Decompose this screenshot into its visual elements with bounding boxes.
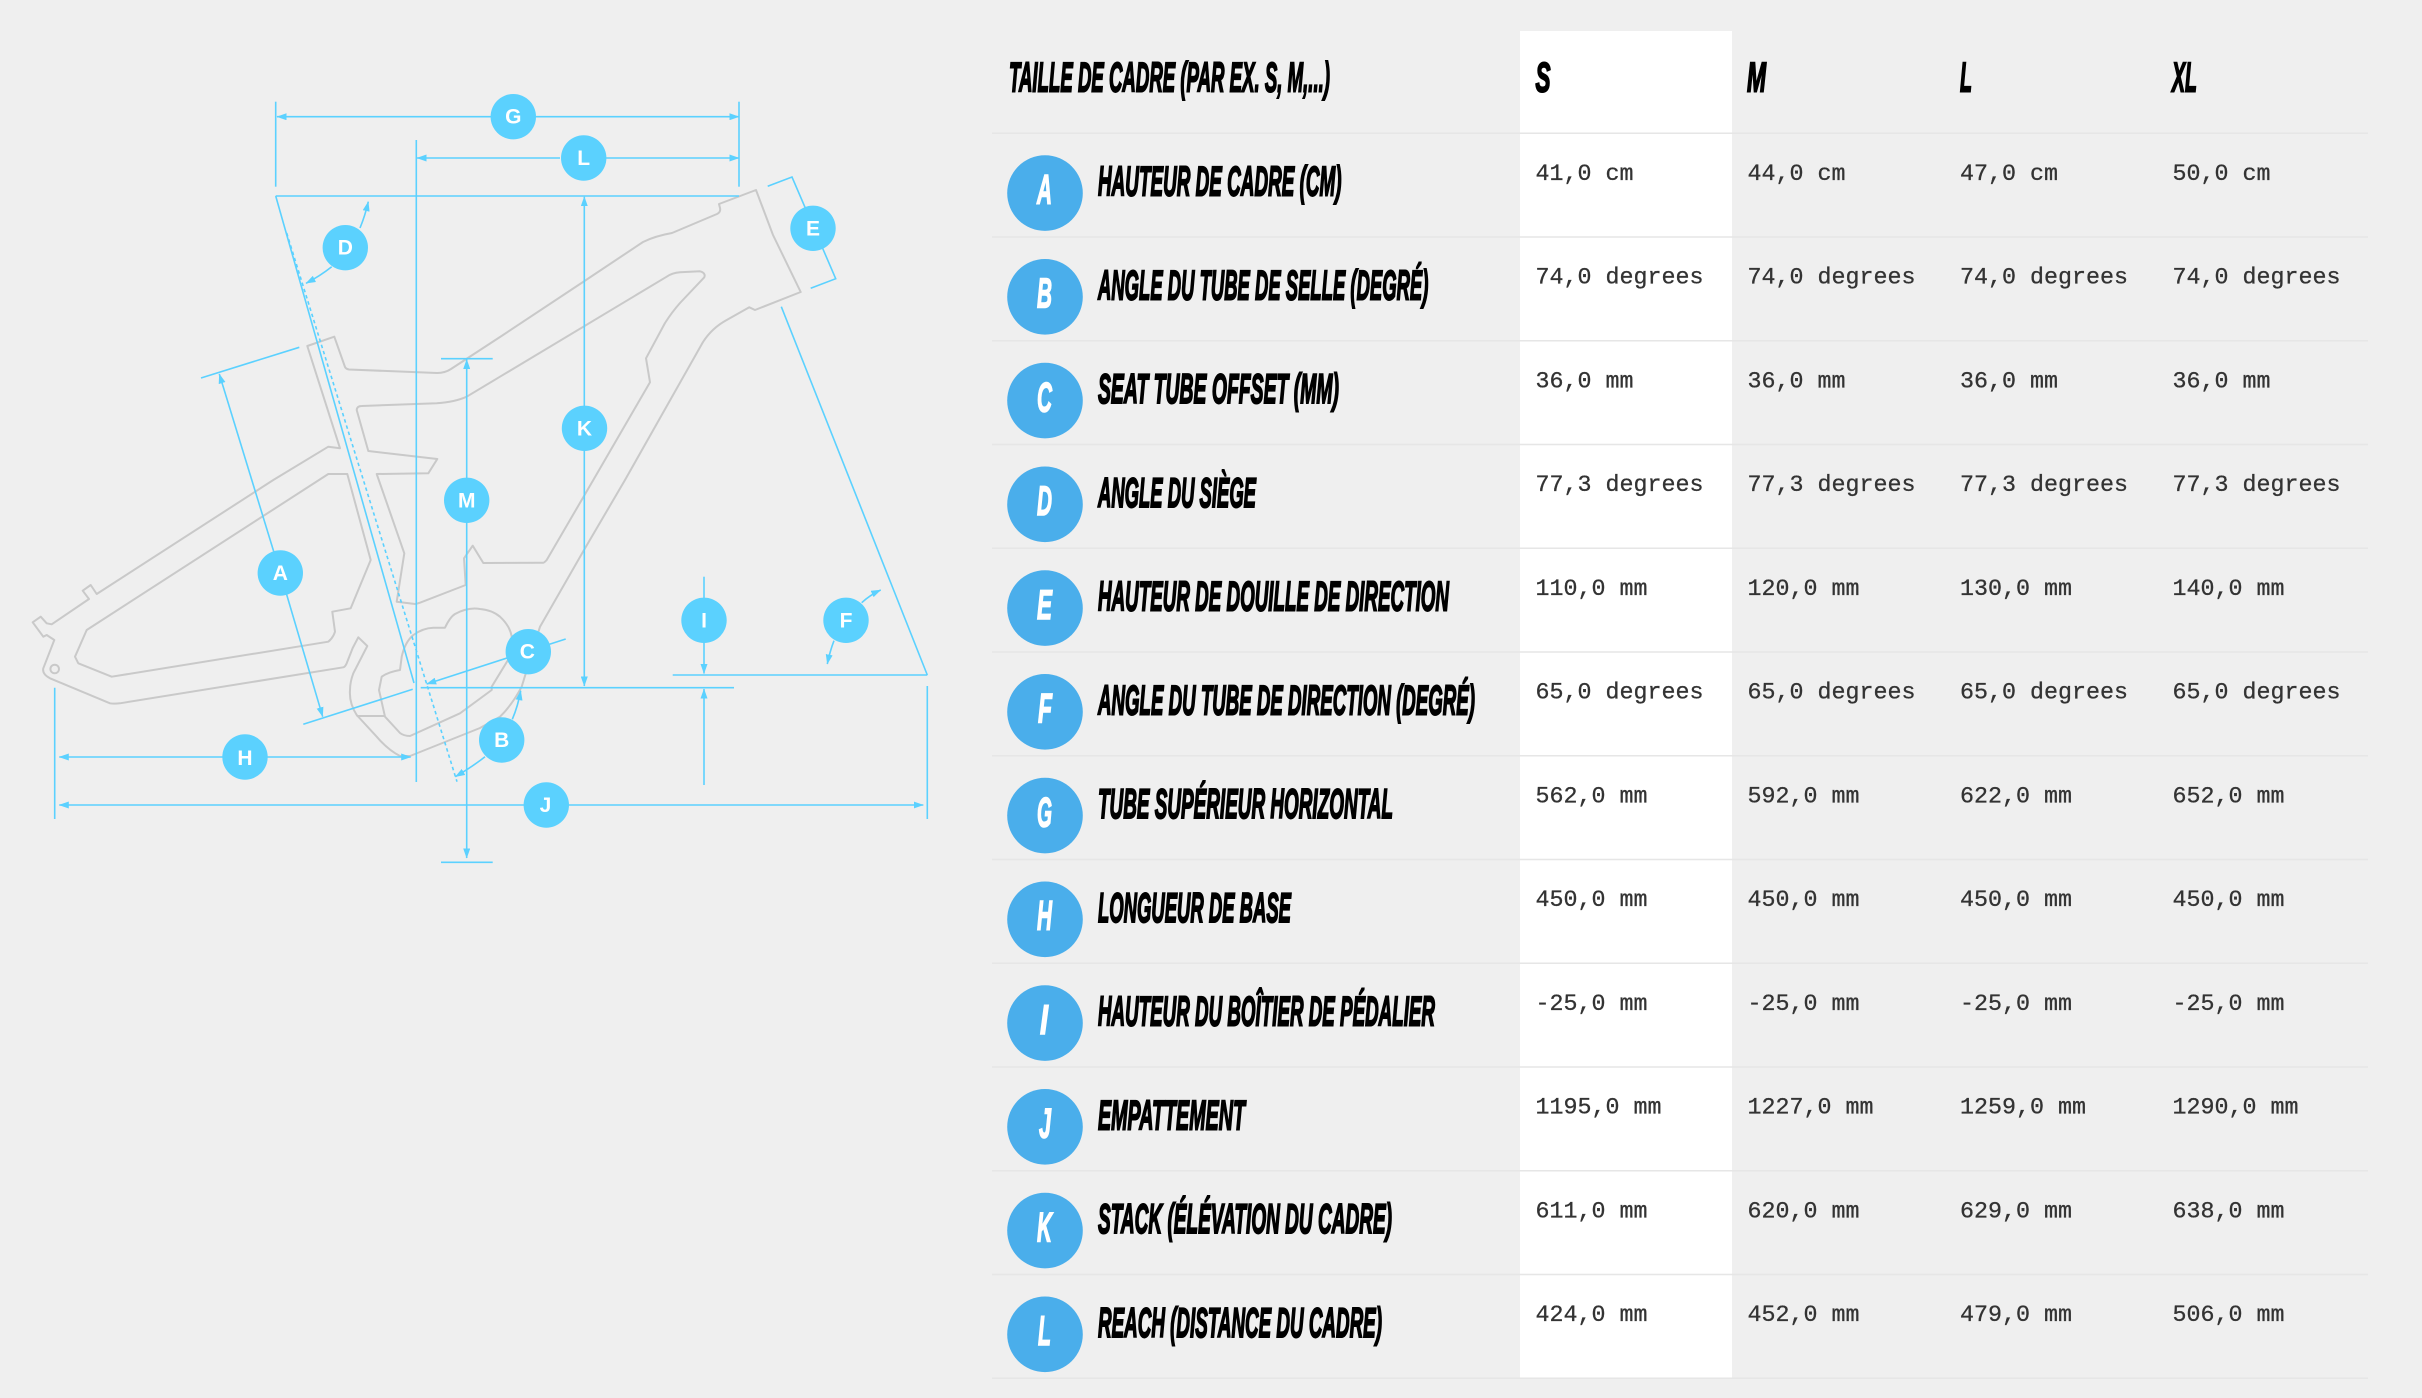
- row H: 450,0 mm: [1748, 888, 1860, 914]
- row E: HAUTEUR DE DOUILLE DE DIRECTION: [1098, 573, 1449, 620]
- table header row: XL: [2171, 54, 2197, 101]
- table header row: S: [1536, 54, 1551, 101]
- row K: STACK (ÉLÉVATION DU CADRE): [1098, 1195, 1392, 1242]
- table header row: [992, 54, 2368, 133]
- marker C: [506, 629, 551, 674]
- marker A: [258, 550, 303, 596]
- row J: EMPATTEMENT: [1098, 1091, 1247, 1138]
- size table: [992, 31, 2368, 1378]
- row C: 36,0 mm: [1536, 369, 1634, 395]
- row B: [992, 259, 2368, 341]
- row F: [992, 674, 2368, 756]
- row L: 424,0 mm: [1536, 1303, 1648, 1329]
- marker B: B: [494, 729, 509, 752]
- row D: 77,3 degrees: [1748, 473, 1916, 499]
- row E: 120,0 mm: [1748, 577, 1860, 603]
- row H: LONGUEUR DE BASE: [1098, 884, 1292, 931]
- row B: 74,0 degrees: [2172, 266, 2340, 292]
- marker E: E: [806, 217, 820, 240]
- marker A: A: [273, 562, 288, 585]
- row I: I: [1040, 996, 1049, 1043]
- row D: 77,3 degrees: [2172, 473, 2340, 499]
- row A: 50,0 cm: [2172, 162, 2270, 188]
- marker H: [222, 734, 268, 780]
- table header row: M: [1747, 54, 1767, 101]
- marker I: [681, 598, 727, 643]
- marker F: [823, 598, 869, 643]
- row K: 620,0 mm: [1748, 1199, 1860, 1225]
- row C: 36,0 mm: [1748, 369, 1846, 395]
- marker C: C: [520, 641, 535, 664]
- row I: HAUTEUR DU BOÎTIER DE PÉDALIER: [1098, 988, 1435, 1035]
- marker B: [479, 717, 524, 763]
- row D: 77,3 degrees: [1536, 473, 1704, 499]
- marker D: [323, 225, 368, 270]
- row D: 77,3 degrees: [1960, 473, 2128, 499]
- marker L: L: [577, 147, 590, 170]
- row C: C: [1037, 373, 1053, 420]
- row F: ANGLE DU TUBE DE DIRECTION (DEGRÉ): [1098, 676, 1475, 723]
- row C: 36,0 mm: [2172, 369, 2270, 395]
- row L: 506,0 mm: [2172, 1303, 2284, 1329]
- row H: 450,0 mm: [1536, 888, 1648, 914]
- row L: REACH (DISTANCE DU CADRE): [1098, 1299, 1382, 1346]
- row H: 450,0 mm: [1960, 888, 2072, 914]
- marker I: I: [701, 609, 707, 632]
- row I: [992, 985, 2368, 1067]
- marker K: K: [577, 417, 592, 440]
- marker G: G: [505, 106, 521, 129]
- row F: F: [1038, 685, 1053, 732]
- highlighted column S: [1520, 31, 1732, 1378]
- marker H: H: [237, 747, 253, 770]
- row L: L: [1038, 1307, 1051, 1354]
- row K: 611,0 mm: [1536, 1199, 1648, 1225]
- marker K: [562, 406, 607, 451]
- table header row: TAILLE DE CADRE (PAR EX. S, M,...): [1009, 54, 1330, 101]
- marker E: [790, 206, 836, 251]
- frame geometry diagram: [33, 94, 927, 862]
- bike frame outline: [33, 190, 801, 756]
- marker D: D: [338, 237, 353, 260]
- row J: 1227,0 mm: [1748, 1096, 1874, 1122]
- row F: 65,0 degrees: [2172, 681, 2340, 707]
- row D: [992, 467, 2368, 548]
- row A: [992, 155, 2368, 237]
- row E: E: [1037, 581, 1053, 628]
- row H: [992, 882, 2368, 963]
- row I: -25,0 mm: [2172, 992, 2284, 1018]
- row A: 41,0 cm: [1536, 162, 1634, 188]
- table header row: L: [1960, 54, 1972, 101]
- row K: [992, 1193, 2368, 1275]
- row I: -25,0 mm: [1748, 992, 1860, 1018]
- row C: [992, 363, 2368, 445]
- dimension lines: [55, 102, 927, 862]
- row C: SEAT TUBE OFFSET (MM): [1098, 365, 1339, 412]
- row I: -25,0 mm: [1960, 992, 2072, 1018]
- row B: ANGLE DU TUBE DE SELLE (DEGRÉ): [1098, 261, 1428, 308]
- marker J: [524, 782, 569, 828]
- row G: 592,0 mm: [1748, 784, 1860, 810]
- row K: K: [1037, 1204, 1054, 1251]
- marker J: J: [540, 794, 551, 817]
- row G: TUBE SUPÉRIEUR HORIZONTAL: [1098, 780, 1393, 827]
- row D: D: [1037, 477, 1052, 524]
- row A: HAUTEUR DE CADRE (CM): [1098, 158, 1342, 205]
- row J: J: [1039, 1100, 1051, 1147]
- row B: 74,0 degrees: [1536, 266, 1704, 292]
- row C: 36,0 mm: [1960, 369, 2058, 395]
- marker L: [561, 135, 606, 181]
- row A: A: [1036, 166, 1052, 213]
- row G: 562,0 mm: [1536, 784, 1648, 810]
- row J: [992, 1089, 2368, 1171]
- row B: 74,0 degrees: [1748, 266, 1916, 292]
- row B: B: [1037, 270, 1052, 317]
- row L: [992, 1297, 2368, 1378]
- row K: 638,0 mm: [2172, 1199, 2284, 1225]
- marker M: [444, 478, 489, 523]
- row A: 44,0 cm: [1748, 162, 1846, 188]
- row H: H: [1037, 892, 1053, 939]
- row H: 450,0 mm: [2172, 888, 2284, 914]
- marker M: M: [458, 489, 475, 512]
- row E: [992, 570, 2368, 652]
- row E: 130,0 mm: [1960, 577, 2072, 603]
- row J: 1259,0 mm: [1960, 1096, 2086, 1122]
- row F: 65,0 degrees: [1960, 681, 2128, 707]
- row A: 47,0 cm: [1960, 162, 2058, 188]
- row E: 110,0 mm: [1536, 577, 1648, 603]
- row F: 65,0 degrees: [1748, 681, 1916, 707]
- row I: -25,0 mm: [1536, 992, 1648, 1018]
- row D: ANGLE DU SIÈGE: [1098, 469, 1257, 516]
- row E: 140,0 mm: [2172, 577, 2284, 603]
- marker G: [491, 94, 536, 139]
- row J: 1290,0 mm: [2172, 1096, 2298, 1122]
- row F: 65,0 degrees: [1536, 681, 1704, 707]
- row G: 622,0 mm: [1960, 784, 2072, 810]
- row G: [992, 778, 2368, 860]
- marker F: F: [840, 609, 853, 632]
- row G: 652,0 mm: [2172, 784, 2284, 810]
- row K: 629,0 mm: [1960, 1199, 2072, 1225]
- row L: 479,0 mm: [1960, 1303, 2072, 1329]
- row J: 1195,0 mm: [1536, 1096, 1662, 1122]
- row G: G: [1037, 788, 1052, 835]
- row B: 74,0 degrees: [1960, 266, 2128, 292]
- row L: 452,0 mm: [1748, 1303, 1860, 1329]
